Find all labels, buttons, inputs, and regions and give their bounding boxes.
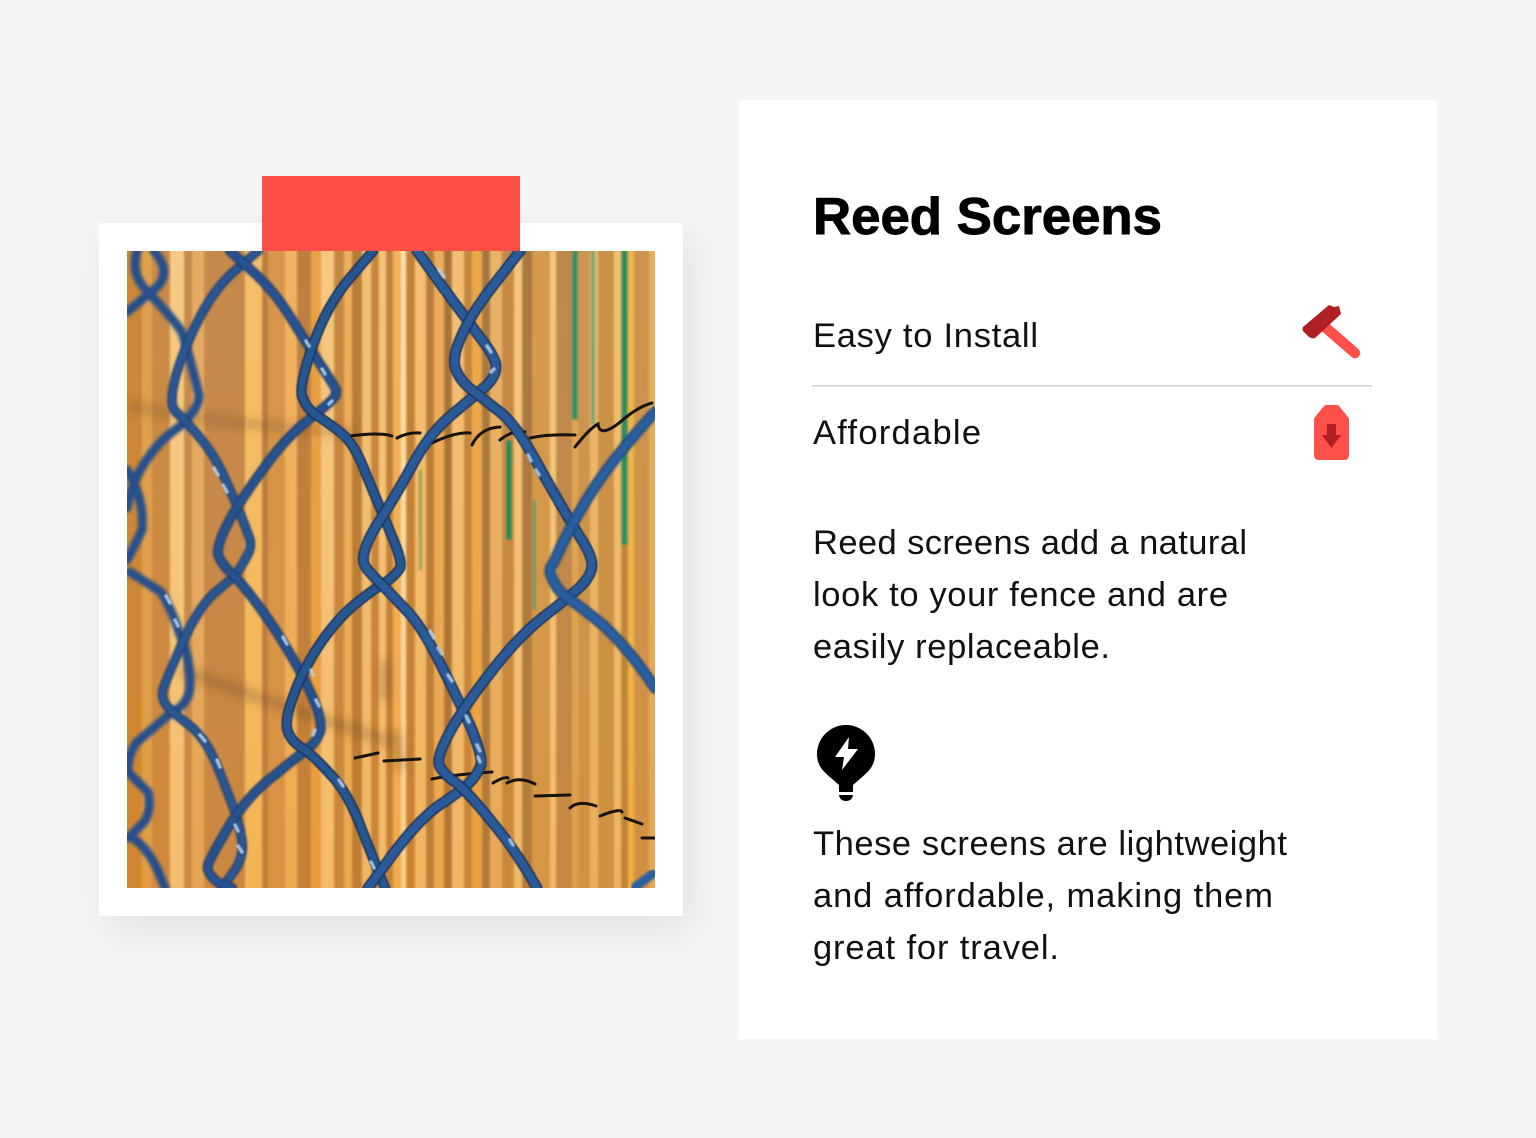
paragraph: description: look to your fence and are — [813, 576, 1228, 614]
icon: hammer — [1302, 305, 1355, 353]
icon: light bulb — [817, 725, 875, 801]
far-left blurred wires — [127, 251, 199, 888]
paragraph: tip — [813, 825, 1287, 967]
barbed tie wire — [350, 403, 655, 838]
paragraph: description — [813, 524, 1247, 666]
paragraph: description: Reed screens add a natural — [813, 524, 1247, 562]
blurred shadows of the tie wires — [127, 405, 400, 770]
icon: price tag with down arrow — [1314, 405, 1349, 460]
photo: chain-link fence over reed screen — [120, 245, 660, 895]
divider — [812, 385, 1372, 386]
paragraph: description: easily replaceable. — [813, 628, 1110, 666]
panel: photo card — [99, 176, 683, 916]
green reeds — [572, 245, 578, 420]
warm tone — [127, 338, 655, 888]
wire highlights — [166, 270, 539, 868]
photo frame — [99, 223, 683, 916]
feature: affordable: Affordable — [813, 414, 981, 452]
heading: Reed Screens — [813, 188, 1162, 246]
red tape — [262, 176, 520, 251]
paragraph: tip: and affordable, making them — [813, 877, 1273, 915]
feature: easy to install: Easy to Install — [813, 317, 1038, 355]
reed stripes — [120, 245, 660, 895]
back-left wires — [162, 251, 336, 888]
front wires — [287, 251, 655, 888]
panel: information card — [739, 100, 1437, 1039]
card background — [739, 100, 1437, 1039]
paragraph: tip: great for travel. — [813, 929, 1059, 967]
paragraph: tip: These screens are lightweight — [813, 825, 1287, 863]
